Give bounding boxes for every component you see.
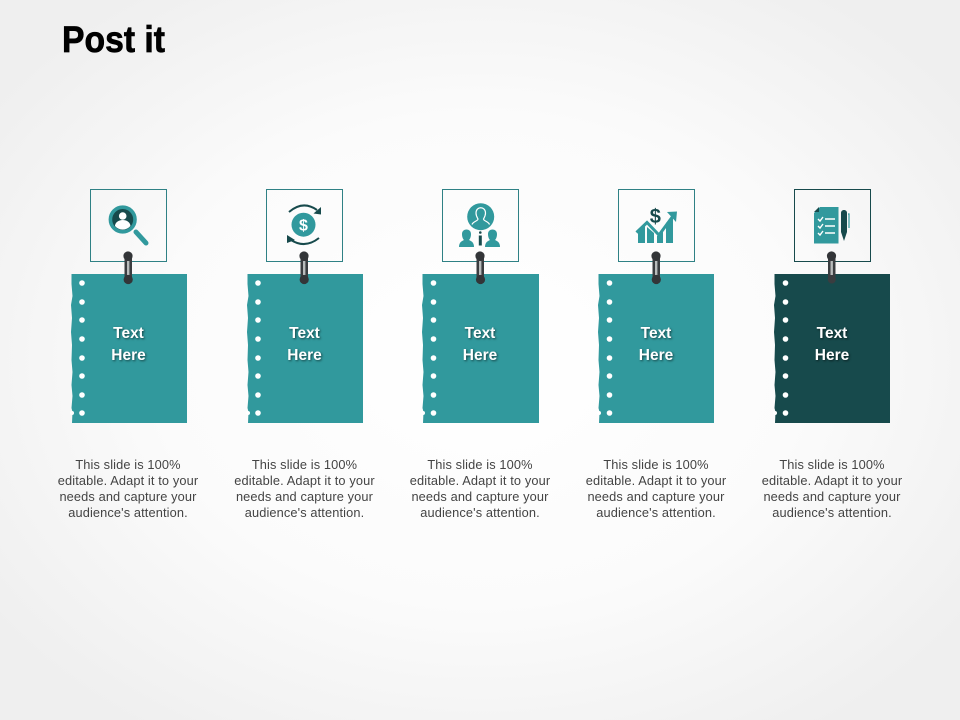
icon: checklist and pen: [814, 207, 849, 244]
note label 5: Here: [815, 347, 850, 364]
description 4: editable. Adapt it to your: [586, 473, 727, 488]
icon: team with leader: [459, 203, 500, 247]
description 4: This slide is 100%: [603, 457, 709, 472]
note sheet 1: [71, 274, 187, 423]
description 5: audience's attention.: [772, 505, 892, 520]
punched holes 3: [421, 280, 436, 416]
description 2: audience's attention.: [245, 505, 364, 520]
description 1: audience's attention.: [68, 505, 188, 520]
title: Post it: [62, 19, 165, 60]
note label 4: Here: [639, 347, 674, 364]
note label 4: Text: [641, 325, 671, 342]
icon box 3: [442, 190, 518, 262]
note sheet 3: [422, 274, 539, 423]
pin 3: [475, 251, 485, 284]
description 2: editable. Adapt it to your: [234, 473, 375, 488]
pin 2: [299, 251, 309, 284]
description 5: needs and capture your: [763, 489, 901, 504]
panel: note 4: [586, 190, 727, 520]
icon box 2: [266, 190, 342, 262]
panel: note 3: [410, 190, 551, 520]
panel: note 2: [234, 190, 375, 520]
icon: dollar exchange: [287, 205, 321, 244]
note label 5: Text: [817, 325, 847, 342]
pin 5: [827, 251, 836, 284]
punched holes 2: [246, 280, 261, 416]
note sheet 4: [598, 274, 714, 423]
description 2: This slide is 100%: [252, 457, 357, 472]
icon box 4: [618, 190, 694, 262]
description 5: editable. Adapt it to your: [762, 473, 903, 488]
description 3: audience's attention.: [420, 505, 540, 520]
panel: note 5: [762, 190, 903, 520]
description 4: needs and capture your: [587, 489, 725, 504]
icon box 5: [794, 190, 870, 262]
note label 3: Here: [463, 347, 498, 364]
note label 2: Text: [289, 325, 320, 342]
note sheet 5: [774, 274, 890, 423]
description 1: needs and capture your: [59, 489, 197, 504]
icon: growth chart with dollar: $: [650, 206, 661, 228]
note label 2: Here: [287, 347, 322, 364]
description 3: needs and capture your: [411, 489, 549, 504]
panel: note 1: [58, 190, 199, 520]
description 2: needs and capture your: [236, 489, 374, 504]
description 1: This slide is 100%: [75, 457, 181, 472]
punched holes 1: [70, 280, 85, 416]
note sheet 2: [247, 274, 363, 423]
icon box 1: [90, 190, 166, 262]
note label 1: Text: [113, 325, 144, 342]
description 4: audience's attention.: [596, 505, 716, 520]
description 3: editable. Adapt it to your: [410, 473, 551, 488]
description 3: This slide is 100%: [427, 457, 533, 472]
pin 4: [651, 251, 661, 284]
description 1: editable. Adapt it to your: [58, 473, 199, 488]
description 5: This slide is 100%: [779, 457, 885, 472]
icon: magnifier with person: [110, 207, 146, 243]
note label 3: Text: [465, 325, 495, 342]
icon: growth chart with dollar: [636, 206, 677, 243]
icon: dollar exchange: $: [299, 218, 308, 234]
pin 1: [123, 251, 133, 284]
punched holes 5: [773, 280, 788, 416]
note label 1: Here: [111, 347, 146, 364]
punched holes 4: [597, 280, 612, 416]
